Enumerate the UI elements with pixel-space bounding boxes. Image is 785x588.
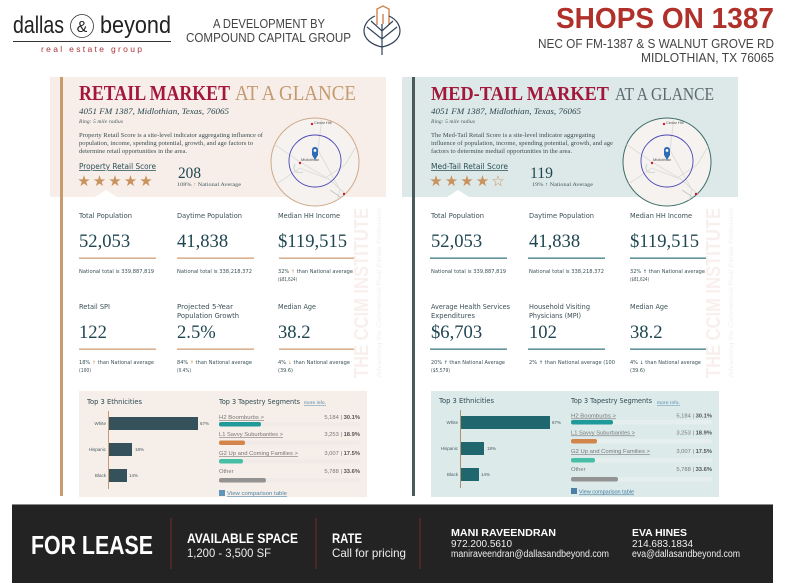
five star rating: ★ — [124, 172, 137, 190]
chart: top 3 tapestry segments, med-tail: 5,788 | 33.6% — [676, 467, 712, 473]
metric: median household income, med-tail — [630, 212, 707, 283]
score value 119: 19% ↑ National Average — [532, 182, 594, 188]
description — [79, 132, 264, 155]
five star rating: ★ — [93, 172, 106, 190]
chart: top 3 tapestry segments, med-tail — [570, 397, 712, 496]
chart: top 3 tapestry segments: View comparison table — [227, 491, 287, 497]
metric: household visiting physicians: 2% ↑ than National average (100 — [529, 360, 615, 366]
metric: median household income: ($81,624) — [278, 277, 297, 283]
chart: top 3 tapestry segments: Other — [219, 469, 234, 475]
property retail score: Property Retail Score — [79, 162, 156, 171]
four star rating: ★ — [429, 172, 443, 190]
chart: top 3 tapestry segments: 3,007 | 17.5% — [324, 451, 360, 457]
contact: mani raveendran: maniraveendran@dallasandbeyond.com — [451, 549, 609, 560]
metric: household visiting physicians: 102 — [529, 322, 557, 343]
chart: top 3 ethnicities, med-tail: Top 3 Ethnicities — [438, 397, 494, 405]
metric: median household income: $119,515 — [278, 231, 347, 252]
map: 5 mile radius, med-tail — [623, 118, 712, 208]
metric: daytime population, med-tail: 41,838 — [529, 231, 580, 252]
score value 119: 119 — [530, 165, 553, 182]
metric: daytime population — [177, 212, 254, 275]
heading: med-tail market at a glance: MED-TAIL MARKET — [431, 83, 609, 105]
chart: top 3 tapestry segments: 3,253 | 18.9% — [324, 432, 360, 438]
map: 5 mile radius, med-tail: Midlothian — [653, 157, 671, 162]
metric: median household income, med-tail: Median HH Income — [630, 212, 692, 220]
map: 5 mile radius: Midlothian — [301, 157, 319, 162]
panel: retail demographics — [79, 391, 367, 497]
contact: eva hines: eva@dallasandbeyond.com — [632, 549, 740, 560]
rate — [332, 530, 406, 560]
metric: median age, med-tail: (39.6) — [630, 368, 645, 374]
metric: total population, med-tail: Total Population — [430, 212, 484, 220]
available space: 1,200 - 3,500 SF — [187, 546, 271, 560]
panel: med-tail demographics — [431, 391, 719, 497]
chart: top 3 ethnicities, med-tail: Black — [447, 472, 459, 477]
metric: average health services expenditures: Average Health Services — [431, 303, 510, 311]
address and ring, med-tail: Ring: 5 mile radius — [430, 119, 475, 125]
header: dallas and beyond logo: real estate group — [41, 44, 142, 54]
metric: average health services expenditures: 20% ↑ than National Average — [431, 360, 505, 366]
chart: top 3 tapestry segments: Top 3 Tapestry Segments — [218, 398, 300, 406]
metric: total population: 52,053 — [79, 231, 130, 252]
five star rating: ★ — [108, 172, 122, 190]
metric: median age, med-tail: 4% ↓ than National average — [630, 360, 701, 366]
metric: daytime population: National total is 338,218,372 — [177, 269, 252, 275]
chart: top 3 ethnicities: 18% — [135, 447, 144, 452]
metric: median age: 38.2 — [278, 322, 311, 343]
metric: daytime population, med-tail: Daytime Population — [529, 212, 594, 220]
chart: top 3 ethnicities, med-tail: White — [446, 420, 458, 425]
address and ring, med-tail: 4051 FM 1387, Midlothian, Texas, 76065 — [431, 106, 581, 116]
metric: household visiting physicians — [528, 303, 615, 366]
metric: average health services expenditures: Expenditures — [431, 312, 475, 320]
panel background: med-tail header — [402, 77, 738, 197]
metric: median household income, med-tail: $119,515 — [630, 231, 699, 252]
watermark: ccim institute — [351, 208, 383, 378]
description: population, income, spending potential, growth, and age factors to — [79, 140, 253, 147]
metric: total population, med-tail: 52,053 — [431, 231, 482, 252]
contact: mani raveendran — [451, 527, 609, 560]
metric: median household income, med-tail: ($81,624) — [630, 277, 649, 283]
chart: top 3 tapestry segments: more info. — [304, 400, 326, 406]
chart: top 3 tapestry segments, med-tail: H2 Boomburbs > — [571, 414, 617, 420]
metric: median age: (39.6) — [278, 368, 293, 374]
metric: retail spi — [79, 303, 156, 374]
chart: top 3 tapestry segments, med-tail: L1 Savvy Suburbanites > — [571, 430, 636, 436]
metric: daytime population, med-tail: National total is 338,218,372 — [529, 269, 604, 275]
metric: median household income — [278, 212, 356, 283]
panel: retail market — [50, 77, 386, 497]
metric: projected population growth — [177, 303, 254, 374]
metric: daytime population, med-tail — [528, 212, 605, 275]
panel background: retail header — [50, 77, 386, 197]
chart: top 3 tapestry segments: 5,788 | 33.6% — [324, 469, 360, 475]
header: dallas and beyond logo: & — [77, 19, 88, 36]
four star rating: ★ — [445, 172, 458, 190]
metric: total population, med-tail — [430, 212, 507, 275]
contact: mani raveendran: MANI RAVEENDRAN — [451, 527, 556, 539]
heading: retail market at a glance — [79, 81, 356, 105]
chart: top 3 tapestry segments: L1 Savvy Suburbanites > — [219, 432, 284, 438]
metric: retail spi: Retail SPI — [79, 303, 110, 311]
med-tail retail score — [429, 162, 508, 190]
chart: top 3 ethnicities: Top 3 Ethnicities — [86, 398, 142, 406]
metric: average health services expenditures — [430, 303, 510, 374]
metric: projected population growth: (0.4%) — [177, 368, 191, 374]
contact: mani raveendran: 972.200.5610 — [451, 539, 512, 550]
metric: daytime population: 41,838 — [177, 231, 228, 252]
score value 208 — [177, 165, 242, 188]
header: developer credit: COMPOUND CAPITAL GROUP — [186, 31, 351, 45]
metric: median age: Median Age — [278, 303, 316, 311]
metric: household visiting physicians: Household Visiting — [529, 303, 590, 311]
chart: top 3 tapestry segments, med-tail: 3,007 | 17.5% — [676, 449, 712, 455]
metric: household visiting physicians: Physicians (MPI) — [529, 312, 581, 320]
four star rating: ☆ — [491, 172, 505, 190]
score value 119 — [530, 165, 594, 188]
metric: median household income: 32% ↑ than National average — [278, 269, 353, 275]
metric: total population: National total is 339,887,819 — [79, 269, 154, 275]
for lease: FOR LEASE — [31, 530, 153, 560]
metric: median age: 4% ↓ than National average — [278, 360, 350, 366]
description, med-tail: factors to determine medtail opportunities in the area. — [431, 148, 572, 155]
metric: retail spi: 18% ↑ than National average — [79, 360, 154, 366]
four star rating: ★ — [460, 172, 474, 190]
rate: Call for pricing — [332, 546, 406, 560]
chart: top 3 tapestry segments — [218, 398, 360, 497]
chart: top 3 tapestry segments, med-tail: View comparison table — [579, 490, 634, 496]
header: dallas and beyond logo — [13, 12, 171, 54]
header: property title and address — [538, 3, 774, 65]
accent bar: med-tail — [412, 77, 415, 496]
description, med-tail: The Med-Tail Retail Score is a site-level indicator aggregating — [431, 132, 596, 139]
map: 5 mile radius — [271, 118, 360, 208]
address and ring: 4051 FM 1387, Midlothian, Texas, 76065 — [79, 106, 229, 116]
address and ring — [78, 106, 229, 125]
score value 208: 108% ↑ National Average — [177, 182, 242, 188]
chart: top 3 ethnicities, med-tail — [438, 397, 561, 488]
chart: top 3 tapestry segments: 5,184 | 30.1% — [324, 415, 360, 421]
watermark: ccim institute, med-tail — [703, 208, 735, 378]
heading: retail market at a glance: RETAIL MARKET — [79, 81, 230, 105]
chart: top 3 ethnicities, med-tail: Hispanic — [441, 446, 459, 451]
header: developer credit: A DEVELOPMENT BY — [213, 17, 326, 31]
metric: total population: Total Population — [78, 212, 132, 220]
five star rating: ★ — [139, 172, 153, 190]
property retail score — [77, 162, 156, 190]
chart: top 3 tapestry segments, med-tail: 5,184 | 30.1% — [676, 414, 712, 420]
metric: median age, med-tail: 38.2 — [630, 322, 663, 343]
watermark: ccim institute: Advancing the Commercial Real Estate Profession — [376, 208, 383, 378]
description, med-tail — [431, 132, 613, 155]
header: property title and address: SHOPS ON 1387 — [556, 3, 774, 35]
metric: median age — [278, 303, 356, 374]
chart: top 3 ethnicities — [86, 398, 209, 489]
chart: top 3 tapestry segments, med-tail: more info. — [657, 400, 680, 406]
score value 208: 208 — [178, 165, 201, 182]
chart: top 3 ethnicities: 14% — [129, 473, 138, 478]
metric: median household income, med-tail: 32% ↑ than National average — [630, 269, 705, 275]
map: 5 mile radius, med-tail: Cedar Hill — [666, 120, 684, 125]
chart: top 3 tapestry segments, med-tail: 3,253 | 18.9% — [676, 430, 712, 436]
chart: top 3 tapestry segments, med-tail: Top 3 Tapestry Segments — [570, 397, 652, 405]
metric: projected population growth: 2.5% — [177, 322, 216, 343]
metric: daytime population: Daytime Population — [177, 212, 242, 220]
description, med-tail: influence of population, income, spending potential, growth, and age — [431, 140, 613, 147]
metric: average health services expenditures: $6,703 — [431, 322, 482, 343]
contact: eva hines: EVA HINES — [632, 527, 687, 539]
address and ring: Ring: 5 mile radius — [78, 119, 123, 125]
contact: eva hines: 214.683.1834 — [632, 539, 693, 550]
chart: top 3 ethnicities, med-tail: 67% — [552, 420, 561, 425]
metric: median household income: Median HH Income — [278, 212, 340, 220]
metric: median age, med-tail — [630, 303, 707, 374]
address and ring, med-tail — [430, 106, 581, 125]
watermark: ccim institute, med-tail: THE CCIM INSTITUTE — [703, 208, 725, 378]
rate: RATE — [332, 530, 362, 546]
chart: top 3 ethnicities: Black — [95, 473, 107, 478]
chart: top 3 tapestry segments, med-tail: G2 Up and Coming Families > — [571, 449, 651, 455]
heading: retail market at a glance: AT A GLANCE — [235, 81, 356, 105]
med-tail retail score: Med-Tail Retail Score — [431, 162, 508, 171]
chart: top 3 tapestry segments, med-tail: Other — [571, 467, 586, 473]
metric: projected population growth: Projected 5-Year — [177, 303, 233, 311]
chart: top 3 ethnicities, med-tail: 18% — [487, 446, 496, 451]
map: 5 mile radius: Cedar Hill — [314, 120, 332, 125]
metric: projected population growth: Population Growth — [177, 312, 239, 320]
panel: med-tail market — [402, 77, 738, 497]
header: developer credit — [186, 17, 351, 45]
icon: compound capital leaf logo — [364, 6, 400, 55]
chart: top 3 tapestry segments: G2 Up and Coming Families > — [219, 451, 299, 457]
accent bar: retail — [60, 77, 63, 496]
chart: top 3 ethnicities: 67% — [200, 421, 209, 426]
chart: top 3 ethnicities, med-tail: 14% — [481, 472, 490, 477]
five star rating — [77, 172, 153, 190]
watermark: ccim institute: THE CCIM INSTITUTE — [351, 208, 373, 378]
header: dallas and beyond logo: beyond — [100, 12, 171, 39]
metric: total population, med-tail: National total is 339,887,819 — [431, 269, 506, 275]
metric: retail spi: (100) — [79, 368, 91, 374]
chart: top 3 ethnicities: Hispanic — [89, 447, 107, 452]
chart: top 3 ethnicities: White — [94, 421, 106, 426]
four star rating: ★ — [476, 172, 489, 190]
footer: leasing and contacts — [12, 504, 773, 583]
available space: AVAILABLE SPACE — [187, 530, 298, 546]
four star rating — [429, 172, 505, 190]
available space — [187, 530, 298, 560]
header: property title and address: MIDLOTHIAN, TX 76065 — [641, 50, 774, 65]
metric: average health services expenditures: ($5,579) — [431, 368, 450, 374]
five star rating: ★ — [77, 172, 91, 190]
description: Property Retail Score is a site-level indicator aggregating influence of — [79, 132, 264, 139]
metric: total population — [78, 212, 156, 275]
description: determine retail opportunities in the area. — [79, 148, 187, 155]
heading: med-tail market at a glance: AT A GLANCE — [615, 84, 714, 104]
chart: top 3 tapestry segments: H2 Boomburbs > — [219, 415, 265, 421]
header: dallas and beyond logo: dallas — [13, 12, 64, 39]
metric: median age, med-tail: Median Age — [630, 303, 668, 311]
watermark: ccim institute, med-tail: Advancing the Commercial Real Estate Profession — [728, 208, 735, 378]
contact: eva hines — [632, 527, 740, 560]
metric: retail spi: 122 — [79, 322, 107, 343]
metric: projected population growth: 84% ↑ than National average — [177, 360, 252, 366]
